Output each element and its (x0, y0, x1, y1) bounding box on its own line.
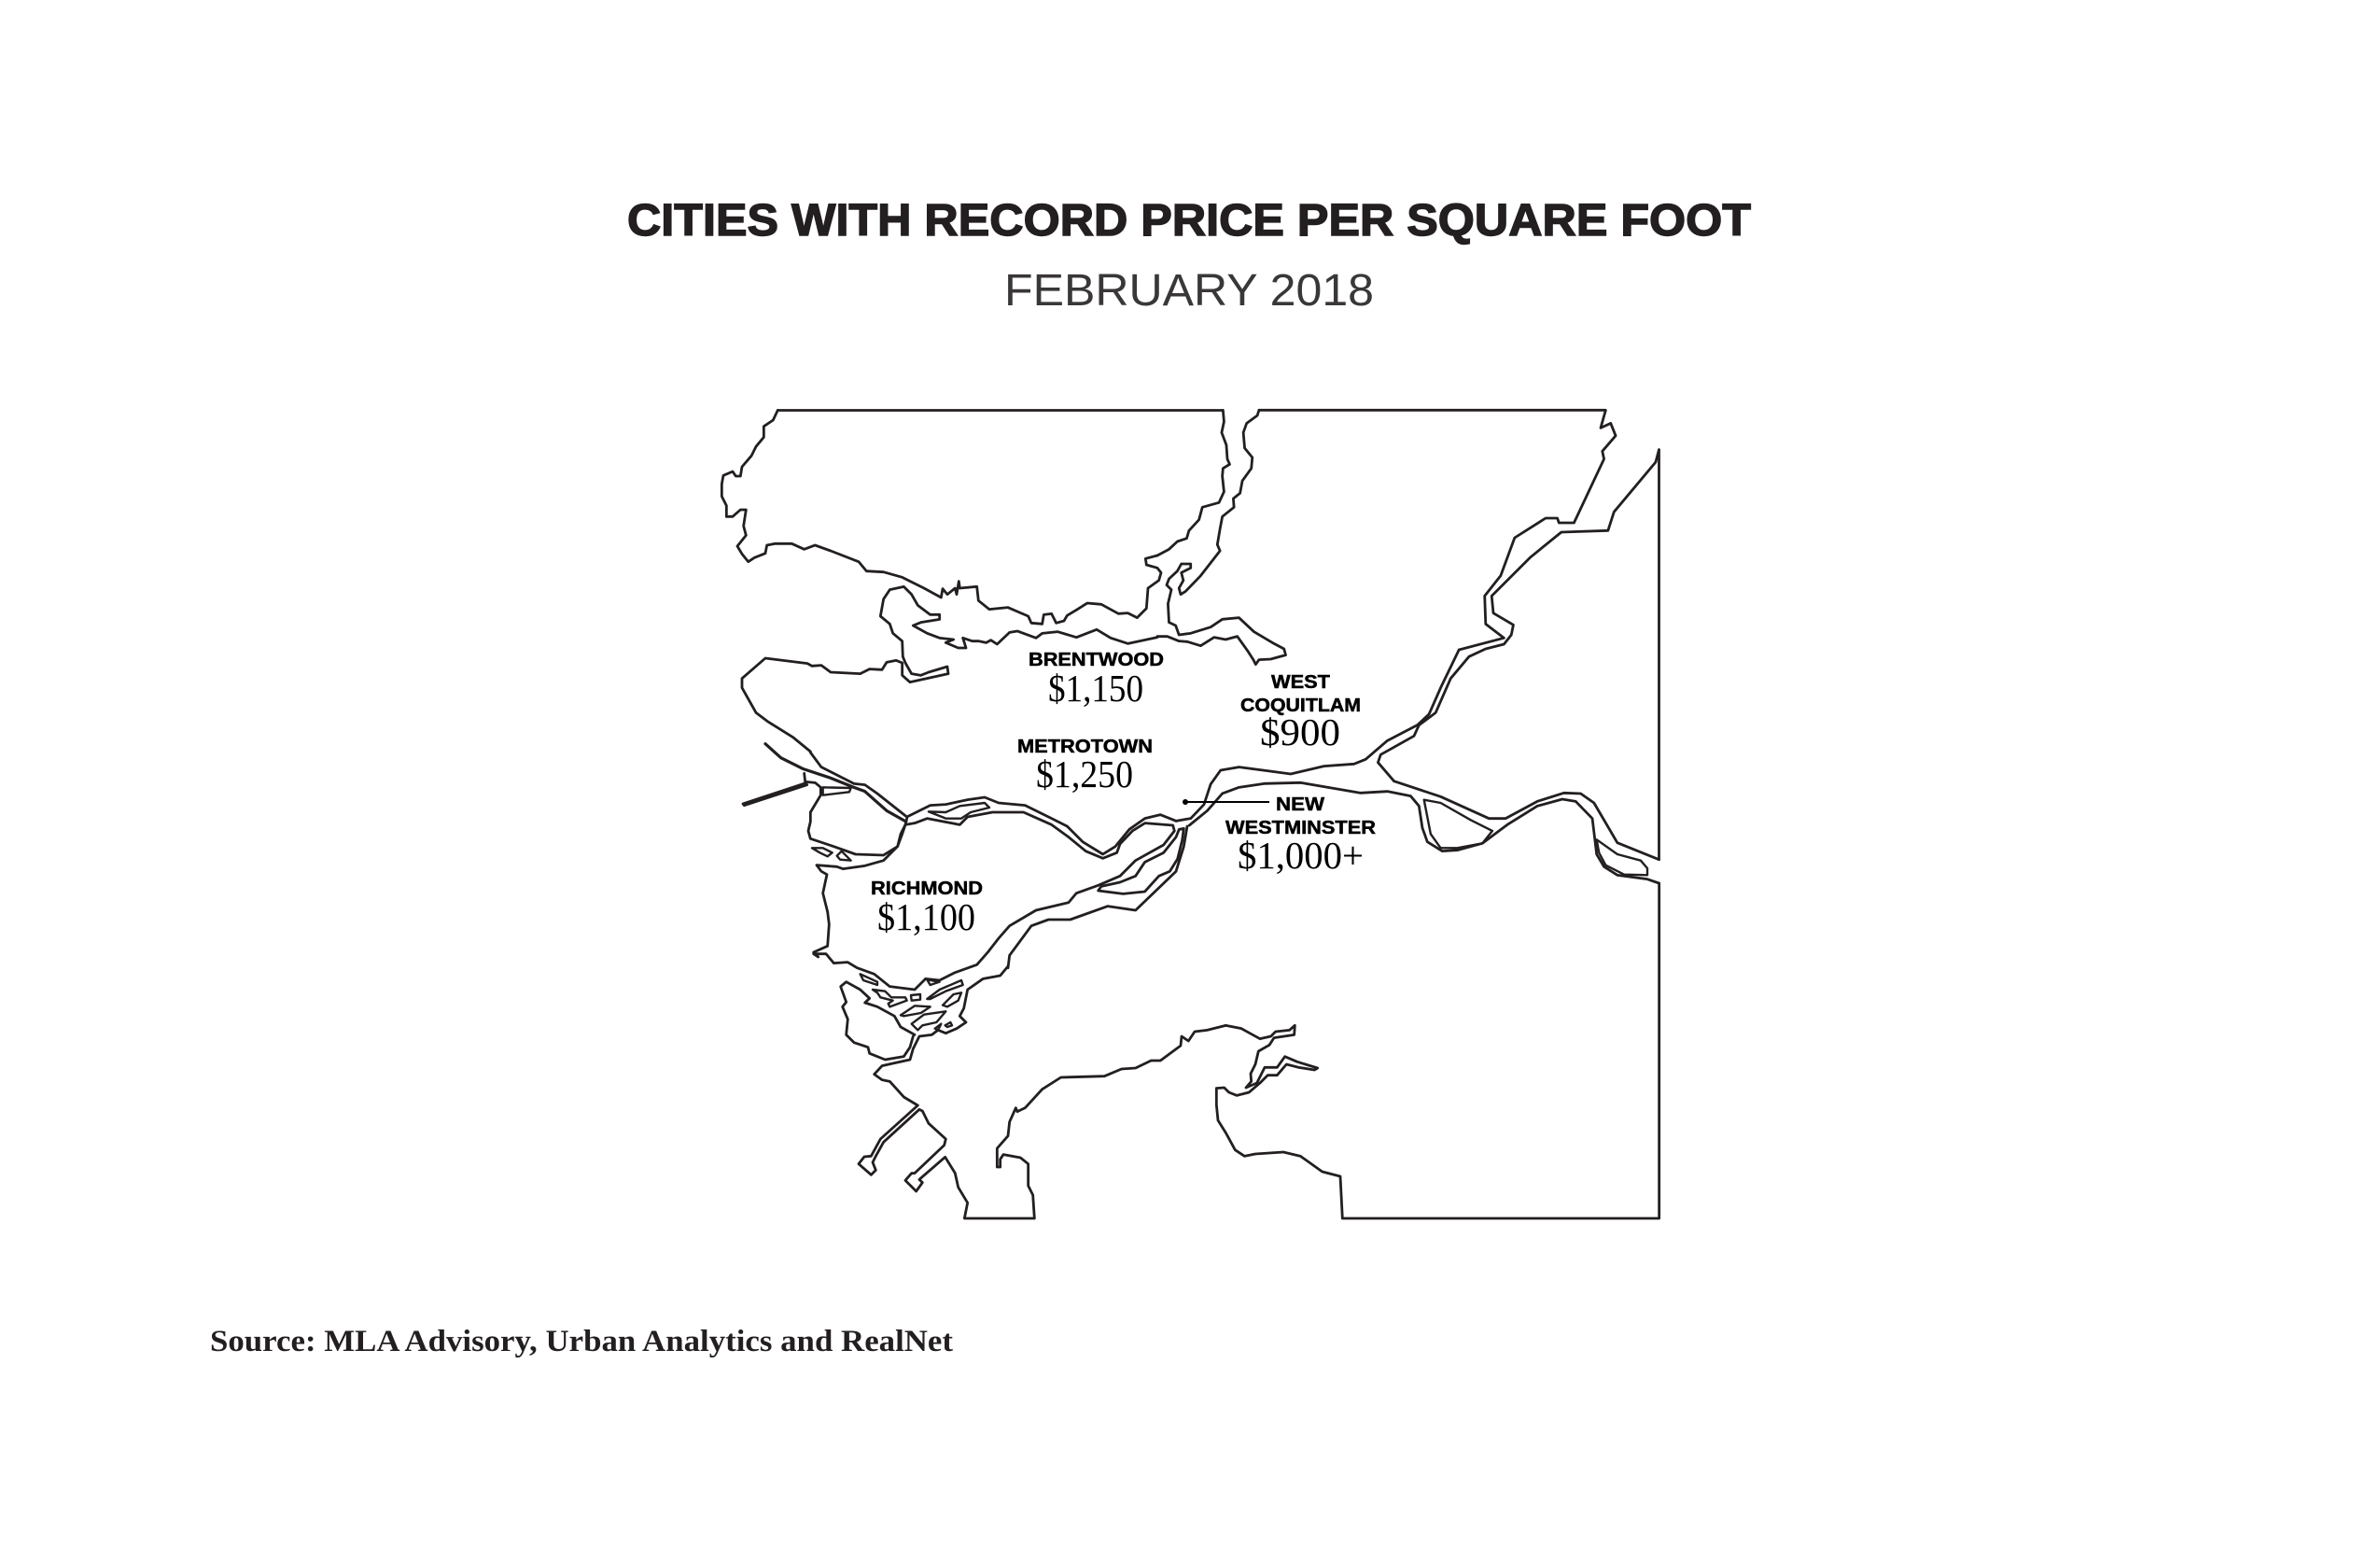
label: West Coquitlam (1240, 672, 1361, 753)
label: Brentwood: $1,150 (1048, 667, 1143, 710)
Mitchell Island (929, 803, 989, 819)
label: Richmond: $1,100 (877, 895, 975, 938)
label: Brentwood (1029, 650, 1164, 710)
label: New Westminster with leader line: WESTMINSTER (1225, 818, 1377, 838)
top border of the north shore (777, 409, 1223, 412)
Barnston Island (1597, 839, 1647, 875)
label: Metrotown: METROTOWN (1017, 737, 1153, 757)
label: West Coquitlam: WEST (1271, 672, 1330, 693)
Sea Island (805, 773, 907, 855)
label: West Coquitlam: COQUITLAM (1240, 696, 1361, 716)
label: Brentwood: BRENTWOOD (1029, 650, 1164, 670)
map of Metro Vancouver (721, 410, 1659, 1218)
label: Metrotown (1017, 737, 1153, 795)
Richmond outline (814, 812, 1174, 990)
label: West Coquitlam: $900 (1260, 710, 1340, 753)
title: CITIES WITH RECORD PRICE PER SQUARE FOOT (627, 196, 1751, 246)
label: New Westminster with leader line (1183, 795, 1377, 877)
label: New Westminster with leader line: $1,000+ (1238, 834, 1364, 877)
label: Richmond: RICHMOND (871, 879, 983, 899)
label: Metrotown: $1,250 (1036, 752, 1133, 795)
Surrey shore (1008, 826, 1187, 968)
label: New Westminster with leader line: NEW (1276, 795, 1324, 815)
source note: Source: MLA Advisory, Urban Analytics and RealNet (210, 1325, 953, 1358)
subtitle: FEBRUARY 2018 (1004, 266, 1374, 316)
Douglas Island (1424, 800, 1492, 848)
delta islands (861, 974, 877, 985)
jetties (743, 783, 807, 806)
Annacis Island (1099, 828, 1183, 893)
label: Richmond (871, 879, 983, 938)
Westham Island (841, 982, 915, 1060)
